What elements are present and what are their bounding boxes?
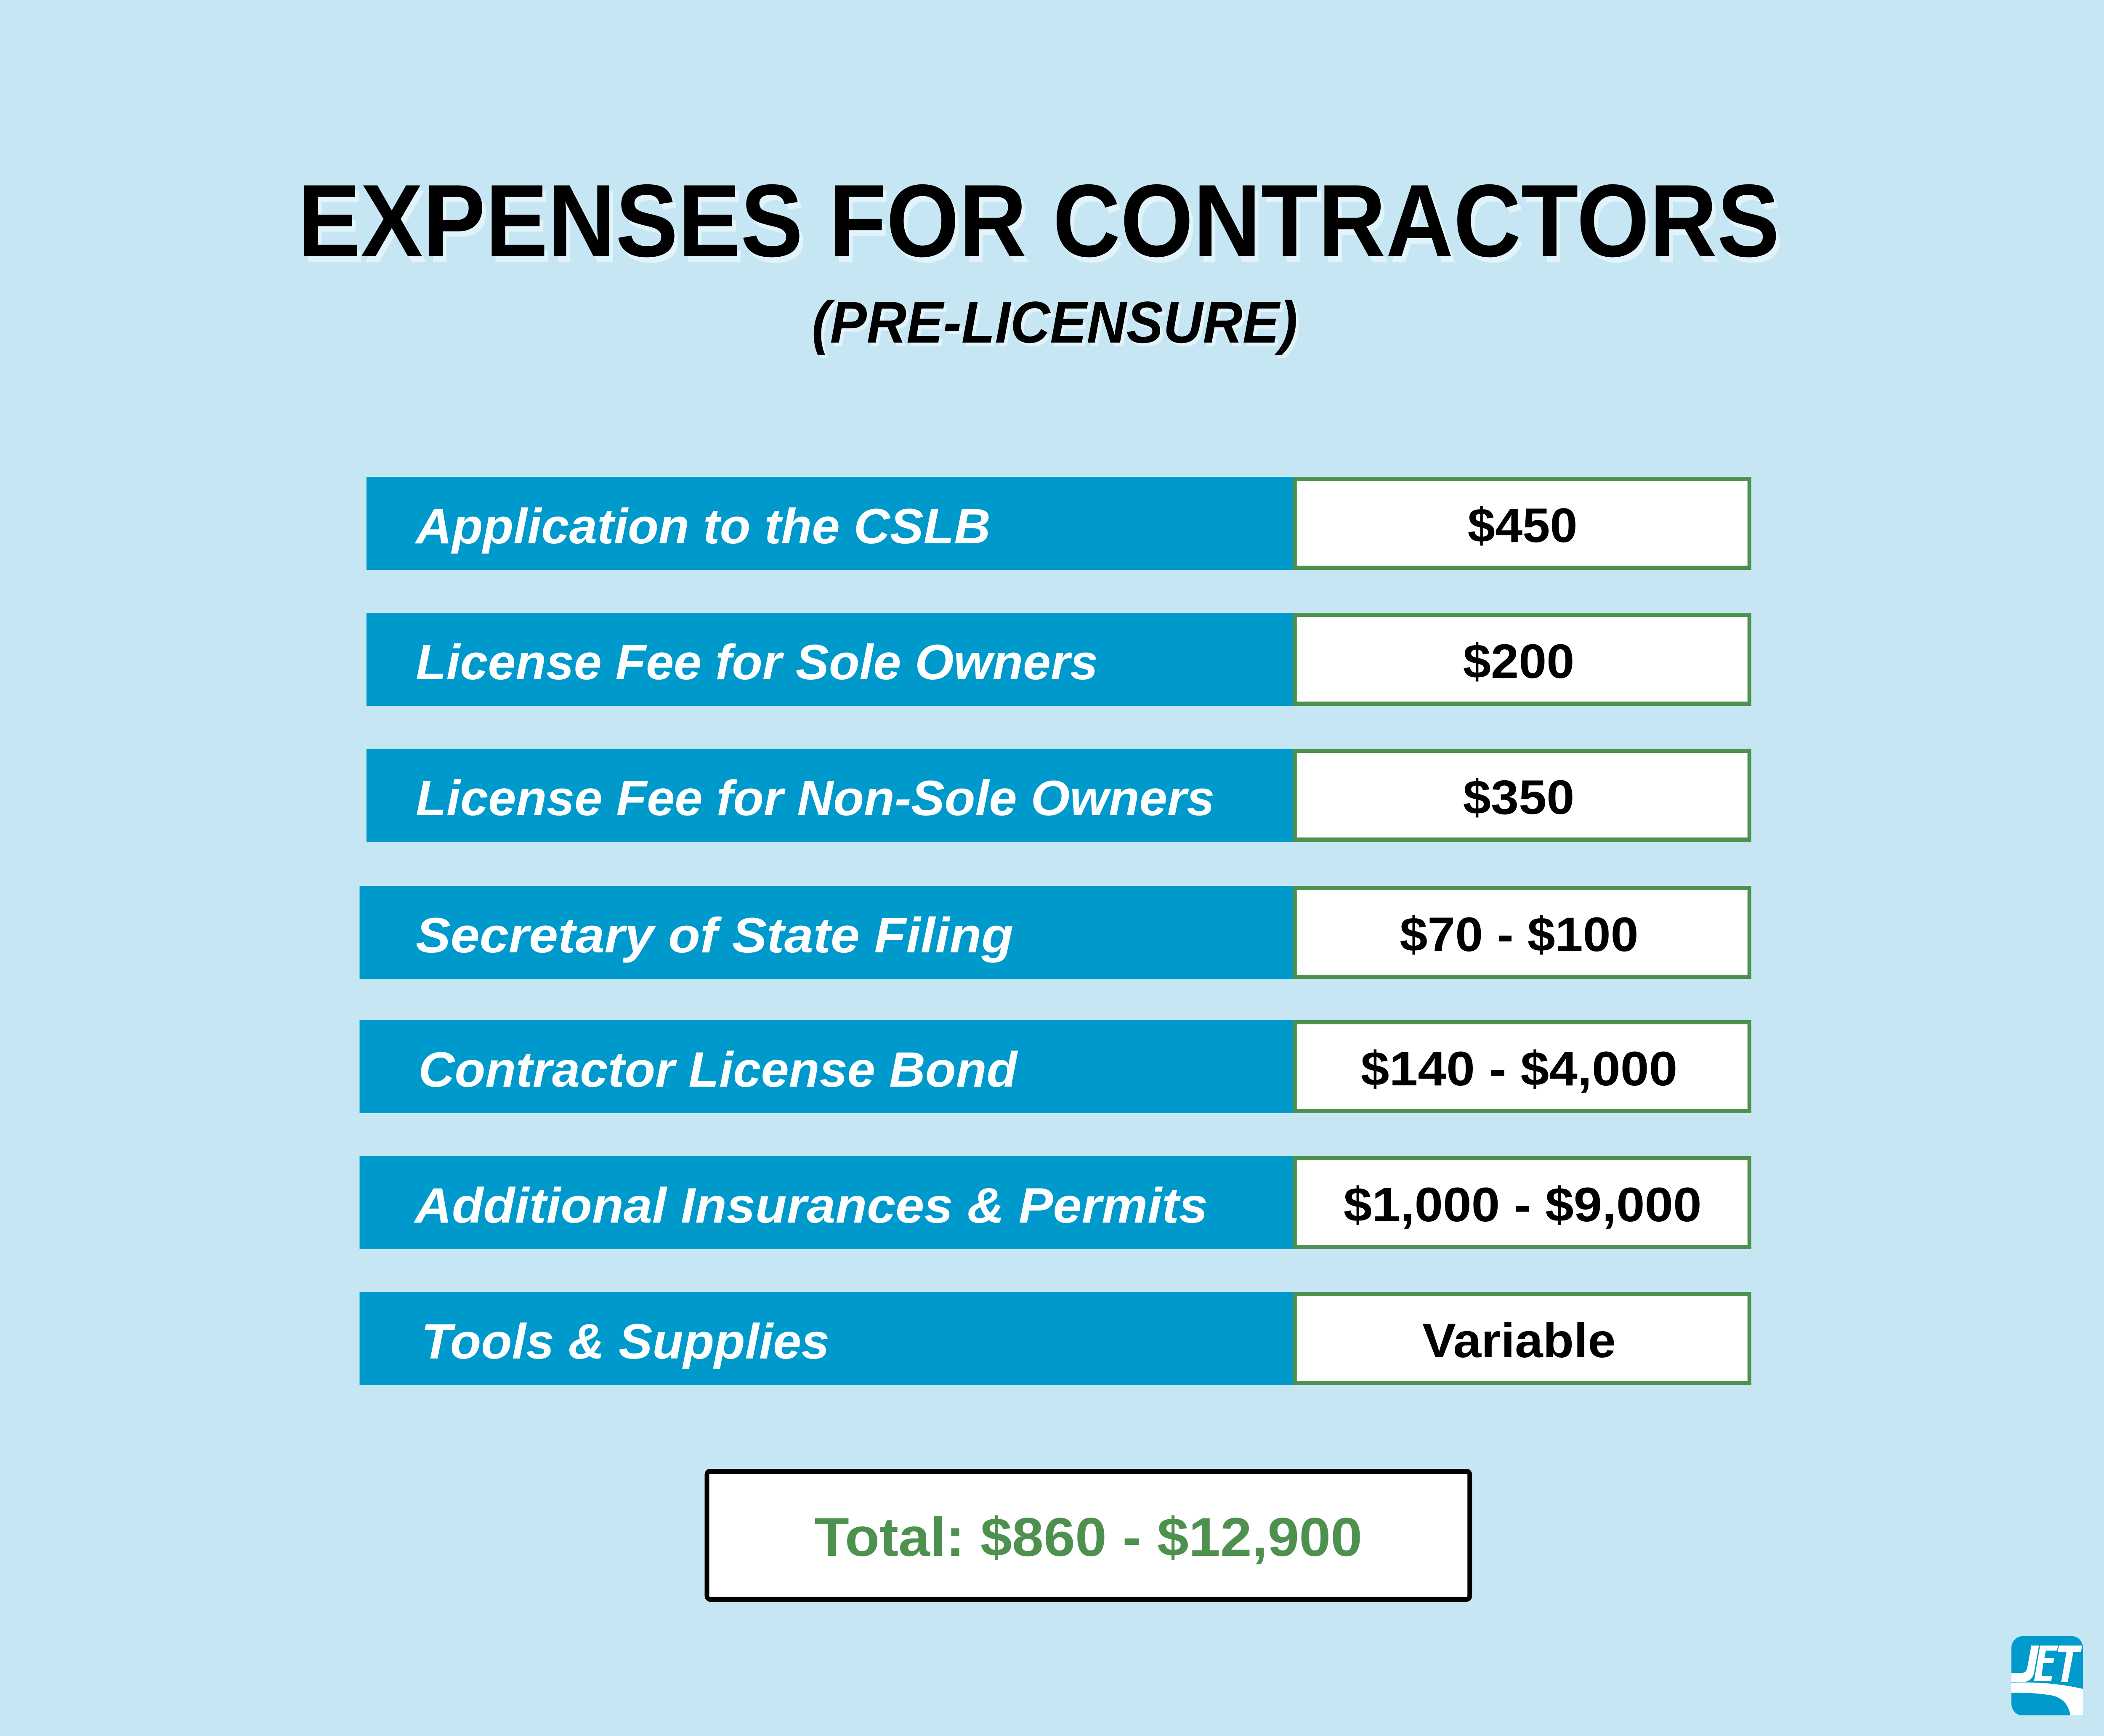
row: sole owners: $200 [1463,635,1574,689]
title: EXPENSES FOR CONTRACTORS [298,163,1780,278]
row: bond: $140 - $4,000 [1361,1042,1677,1096]
row: non-sole owners: $350 [1463,771,1574,824]
row: sole owners [367,613,1749,706]
total box: Total: $860 - $12,900 [814,1507,1362,1568]
row: application [367,477,1749,570]
row: insurances [360,1156,1749,1249]
row: bond: Contractor License Bond [419,1042,1018,1097]
row: secretary of state: Secretary of State Filing [416,907,1013,963]
row: insurances: Additional Insurances & Permits [413,1178,1208,1233]
row: tools: Tools & Supplies [421,1313,829,1369]
row: secretary of state: $70 - $100 [1400,908,1639,962]
row: bond [360,1020,1749,1113]
row: application: Application to the CSLB [414,498,991,554]
row: insurances: $1,000 - $9,000 [1344,1178,1702,1232]
row: tools [360,1292,1749,1385]
row: non-sole owners: License Fee for Non-Sole Owners [416,770,1214,826]
title: EXPENSES FOR CONTRACTORS [302,168,1783,284]
subtitle: (PRE-LICENSURE) [812,290,1298,355]
row: non-sole owners [367,749,1749,842]
row: secretary of state [360,886,1749,979]
total box [707,1471,1470,1599]
subtitle: (PRE-LICENSURE) [815,293,1301,359]
row: application: $450 [1468,499,1578,553]
icon: JET logo [2011,1636,2083,1715]
row: tools: Variable [1422,1314,1616,1368]
row: sole owners: License Fee for Sole Owners [416,634,1098,690]
